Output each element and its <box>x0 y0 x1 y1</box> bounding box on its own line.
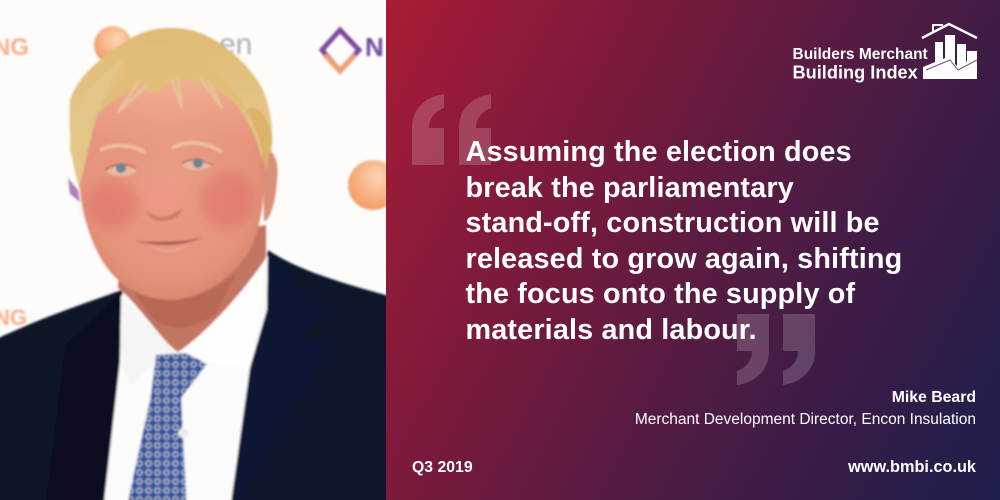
tie <box>126 353 207 500</box>
website url: www.bmbi.co.uk <box>847 458 977 476</box>
attribution name: Mike Beard <box>892 389 976 406</box>
face <box>78 71 264 300</box>
shirt button <box>178 428 188 438</box>
quote text: released to grow again, shifting <box>466 243 902 275</box>
icon: opening quotation marks <box>412 94 491 165</box>
hair fringe <box>98 70 243 112</box>
shirt <box>103 256 268 500</box>
nose shadow <box>146 208 182 221</box>
icon: house roof <box>922 24 977 38</box>
panel: gradient quote background <box>386 0 1000 500</box>
cheeks <box>86 181 138 229</box>
photo: Mike Beard portrait <box>0 0 398 500</box>
backdrop logos: en <box>219 28 252 61</box>
quote text: materials and labour. <box>466 314 757 346</box>
logo: Builders Merchant Building Index <box>792 24 977 82</box>
logo wordmark: Builders Merchant <box>792 46 928 63</box>
icon: bars with line <box>923 35 977 79</box>
mouth <box>135 238 202 245</box>
neck <box>118 225 266 352</box>
jacket <box>0 290 135 500</box>
backdrop logos: N <box>365 32 384 62</box>
left lapel <box>45 292 121 500</box>
brows and eyes <box>100 145 145 152</box>
quote text: Assuming the election does <box>466 136 852 168</box>
date label: Q3 2019 <box>412 459 473 476</box>
shirt collar <box>122 297 176 384</box>
backdrop logos <box>0 26 398 330</box>
quote text: stand-off, construction will be <box>466 207 880 239</box>
logo wordmark: Building Index <box>792 62 918 82</box>
attribution role: Merchant Development Director, Encon Insulation <box>635 411 976 428</box>
hair back <box>69 28 272 190</box>
quote text: break the parliamentary <box>466 172 794 204</box>
right lapel <box>252 255 270 374</box>
nose <box>144 175 180 215</box>
quote text: the focus onto the supply of <box>466 278 855 310</box>
icon: closing quotation marks <box>737 314 815 385</box>
ear <box>262 149 278 221</box>
